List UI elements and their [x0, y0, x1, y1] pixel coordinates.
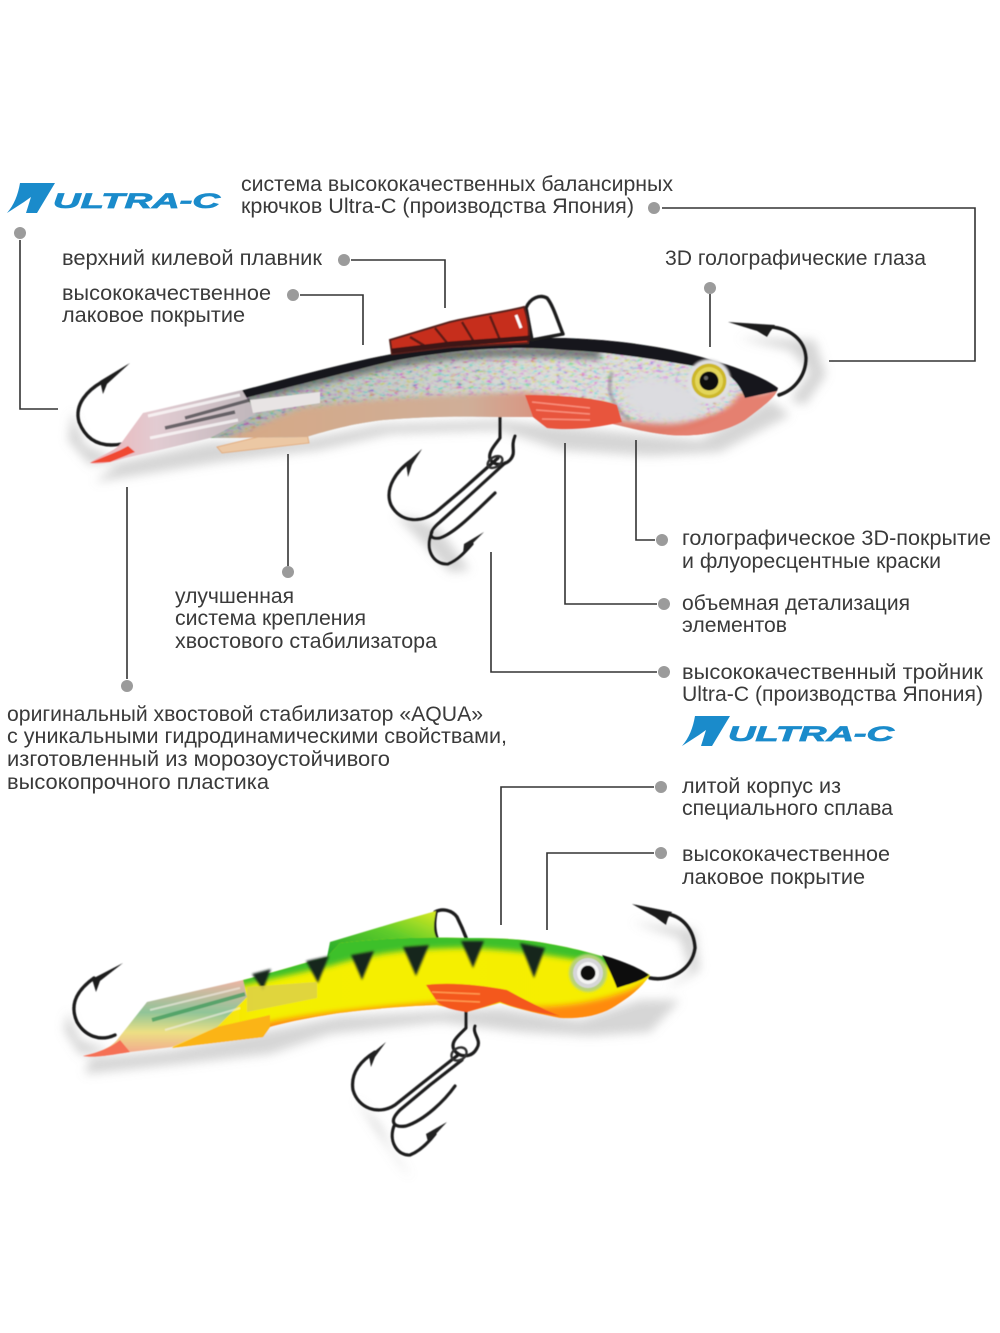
label: AQUA tail stabilizer: оригинальный хвостовой стабилизатор «AQUA» [7, 703, 483, 726]
keel fin [327, 910, 467, 957]
eye [687, 359, 731, 403]
stabilizer fin [217, 433, 309, 453]
logo: Ultra-C bottom: ULTRA-C [728, 723, 895, 746]
snout [602, 955, 649, 988]
eye [569, 954, 607, 992]
label: lacquer coating top [62, 282, 271, 327]
logo: Ultra-C bottom [682, 716, 895, 746]
label: holographic coating [682, 527, 991, 573]
label: volume detail: элементов [682, 614, 787, 637]
treble hook [353, 1012, 478, 1155]
label: lacquer coating bottom: высококачественное [682, 843, 890, 866]
label: treble hook: высококачественный тройник [682, 661, 984, 684]
leader: stabilizer mount [282, 454, 294, 578]
hook: nose [728, 322, 806, 395]
leader: volume detail [565, 443, 670, 610]
body [172, 936, 651, 1048]
insert strip [247, 982, 317, 1012]
label: stabilizer mount: улучшенная [175, 585, 294, 608]
logo: Ultra-C top: ULTRA-C [53, 190, 221, 213]
leader: lacquer coating bottom [547, 847, 667, 930]
leader: hooks right [648, 202, 975, 361]
treble hook [389, 417, 515, 564]
label: cast body: литой корпус из [682, 775, 841, 798]
leader: hooks left [14, 227, 58, 409]
label: 3D eyes: 3D голографические глаза [665, 247, 926, 270]
keel fin [390, 296, 563, 354]
logo: Ultra-C top [7, 183, 221, 213]
label: treble hook: Ultra-C (производства Япония) [682, 683, 983, 706]
leader: 3D eyes [704, 282, 716, 347]
shadow: firetiger lure [64, 922, 700, 1178]
label: stabilizer mount: хвостового стабилизатора [175, 630, 437, 653]
pectoral fin [426, 984, 560, 1016]
label: lacquer coating top: высококачественное [62, 282, 271, 305]
tail stabilizer [90, 390, 320, 464]
label: lacquer coating top: лаковое покрытие [62, 304, 245, 327]
tail stabilizer [83, 980, 317, 1057]
label: volume detail [682, 592, 910, 637]
black bars [252, 941, 545, 990]
tail insert [250, 392, 320, 413]
heading: hook system [241, 173, 673, 218]
label: stabilizer mount [175, 585, 437, 653]
label: AQUA tail stabilizer: с уникальными гидродинамическими свойствами, [7, 725, 507, 748]
leader: treble hook [491, 552, 670, 678]
hook: tail [78, 363, 130, 445]
hook: nose [632, 904, 695, 979]
label: holographic coating: и флуоресцентные краски [682, 550, 941, 573]
label: lacquer coating bottom [682, 843, 890, 889]
pectoral fin [525, 395, 622, 429]
label: holographic coating: голографическое 3D-покрытие [682, 527, 991, 550]
heading: hook system: крючков Ultra-C (производства Япония) [241, 195, 634, 218]
leader: cast body [501, 781, 667, 925]
leader: lacquer coating top [287, 289, 363, 345]
heading: hook system: система высококачественных балансирных [241, 173, 673, 196]
label: upper keel fin: верхний килевой плавник [62, 247, 323, 270]
shadow: silver lure [68, 338, 826, 572]
label: AQUA tail stabilizer [7, 703, 507, 794]
body [210, 337, 779, 439]
label: AQUA tail stabilizer: изготовленный из морозоустойчивого [7, 748, 390, 771]
label: cast body: специального сплава [682, 797, 893, 820]
label: lacquer coating bottom: лаковое покрытие [682, 866, 865, 889]
label: volume detail: объемная детализация [682, 592, 910, 615]
leader: holographic coating [636, 440, 668, 546]
label: cast body [682, 775, 893, 820]
label: treble hook [682, 661, 984, 706]
lure: firetiger [64, 904, 700, 1178]
leader: keel fin [338, 254, 445, 308]
lure: silver [68, 296, 826, 572]
hook: tail [74, 963, 123, 1038]
leader: tail stabilizer [121, 487, 133, 692]
label: stabilizer mount: система крепления [175, 607, 366, 630]
label: AQUA tail stabilizer: высокопрочного пластика [7, 771, 269, 794]
